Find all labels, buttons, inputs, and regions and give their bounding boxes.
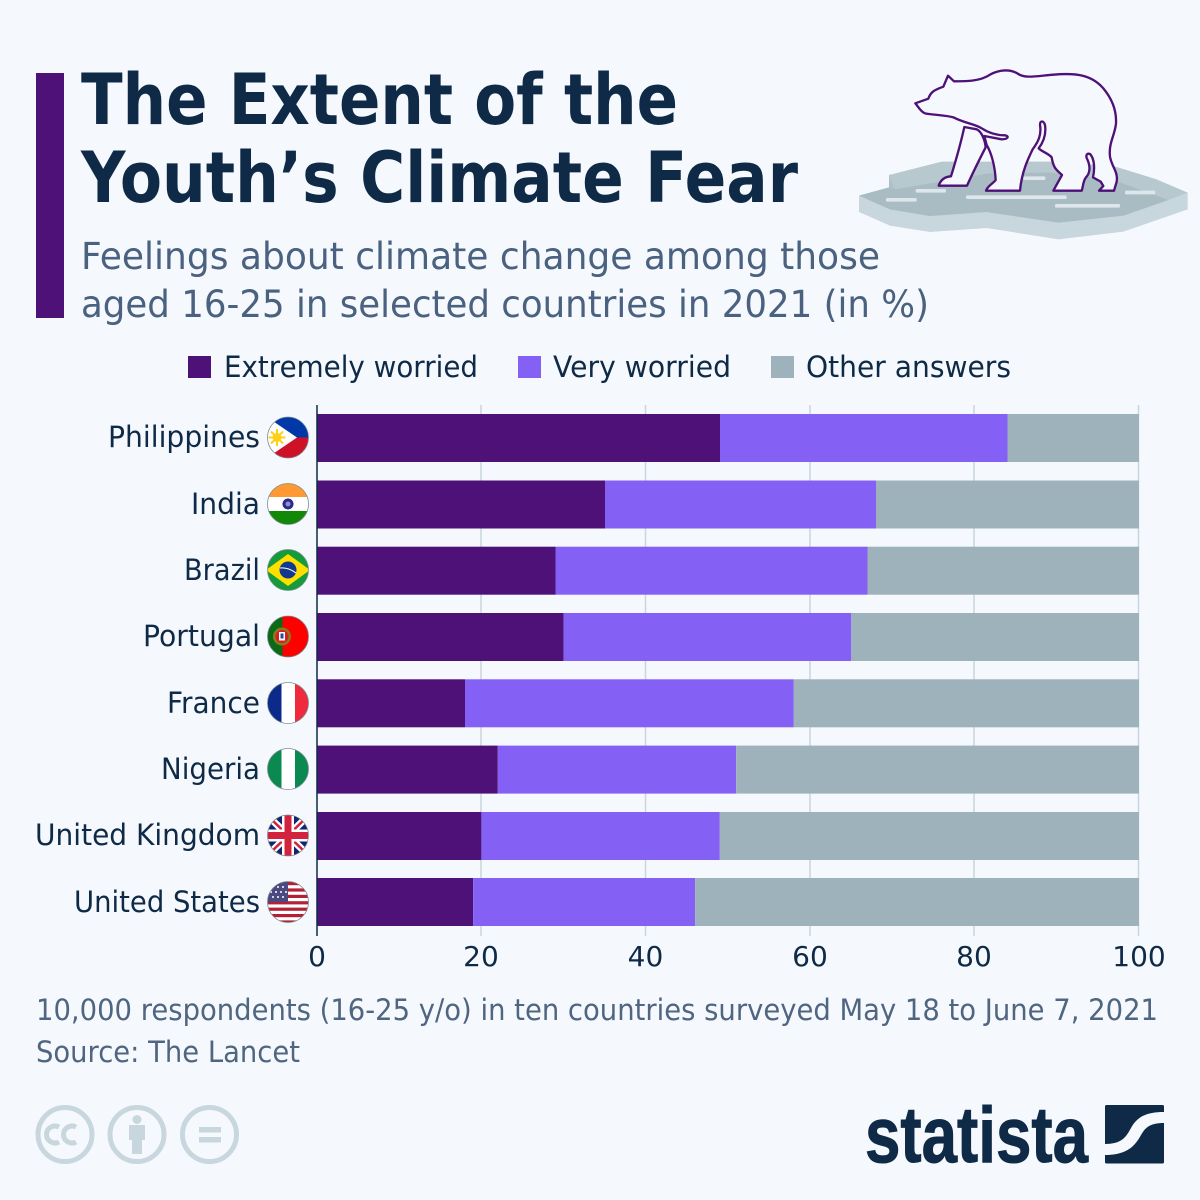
flag: France xyxy=(267,682,309,724)
logo mark xyxy=(1105,1105,1164,1164)
country labels: France xyxy=(167,686,260,720)
footnote: 10,000 respondents (16-25 y/o) in ten countries surveyed May 18 to June 7, 2021 xyxy=(36,993,1158,1027)
legend item: other answers: Other answers xyxy=(806,350,1011,384)
illustration: polar bear on ice floe xyxy=(859,70,1188,239)
flag: Philippines xyxy=(267,417,309,458)
country labels: Portugal xyxy=(143,619,260,653)
icon: no derivatives xyxy=(182,1108,236,1162)
title: Youth’s Climate Fear xyxy=(80,137,798,219)
subtitle: Feelings about climate change among those xyxy=(81,235,880,278)
flag: Nigeria xyxy=(267,748,309,790)
bar: France xyxy=(317,679,1139,727)
bar: United States xyxy=(317,878,1139,926)
flag: United Kingdom xyxy=(267,815,309,857)
icon: attribution xyxy=(110,1108,164,1162)
footnote: Source: The Lancet xyxy=(36,1035,300,1069)
statista logo: statista xyxy=(865,1090,1089,1179)
x axis tick labels: 100 xyxy=(1112,940,1166,973)
stacked bar chart xyxy=(308,405,1166,973)
country labels: United States xyxy=(74,885,260,919)
flag: India xyxy=(267,483,309,525)
y axis line xyxy=(316,405,318,936)
title: The Extent of the xyxy=(81,59,678,141)
country labels: United Kingdom xyxy=(35,818,260,852)
bar: Nigeria xyxy=(317,746,1139,794)
country labels: Nigeria xyxy=(161,752,260,786)
flag: Brazil xyxy=(266,549,310,591)
country labels: India xyxy=(191,487,260,521)
icon: creative commons xyxy=(38,1108,92,1162)
subtitle: aged 16-25 in selected countries in 2021 (in %) xyxy=(81,283,929,326)
bar: Portugal xyxy=(317,613,1139,661)
country labels xyxy=(35,420,260,919)
flag: United States xyxy=(267,881,309,924)
bar: Brazil xyxy=(317,547,1139,595)
bar: Philippines xyxy=(317,414,1139,462)
flag: Portugal xyxy=(267,616,309,658)
legend xyxy=(188,350,1011,384)
legend item: extremely worried: Extremely worried xyxy=(224,350,478,384)
country labels: Brazil xyxy=(184,553,260,587)
subtitle xyxy=(81,235,929,326)
legend item: very worried: Very worried xyxy=(553,350,731,384)
x axis tick labels: 60 xyxy=(792,940,828,973)
title xyxy=(80,59,798,219)
x axis tick labels: 20 xyxy=(463,940,499,973)
x axis tick labels: 40 xyxy=(628,940,663,973)
footnote xyxy=(36,993,1158,1069)
country labels: Philippines xyxy=(108,420,260,454)
accent bar xyxy=(36,73,64,318)
x axis tick labels xyxy=(308,940,1166,973)
bar: India xyxy=(317,480,1139,528)
x axis tick labels: 0 xyxy=(308,940,326,973)
x axis tick labels: 80 xyxy=(956,940,992,973)
bar: United Kingdom xyxy=(317,812,1139,860)
